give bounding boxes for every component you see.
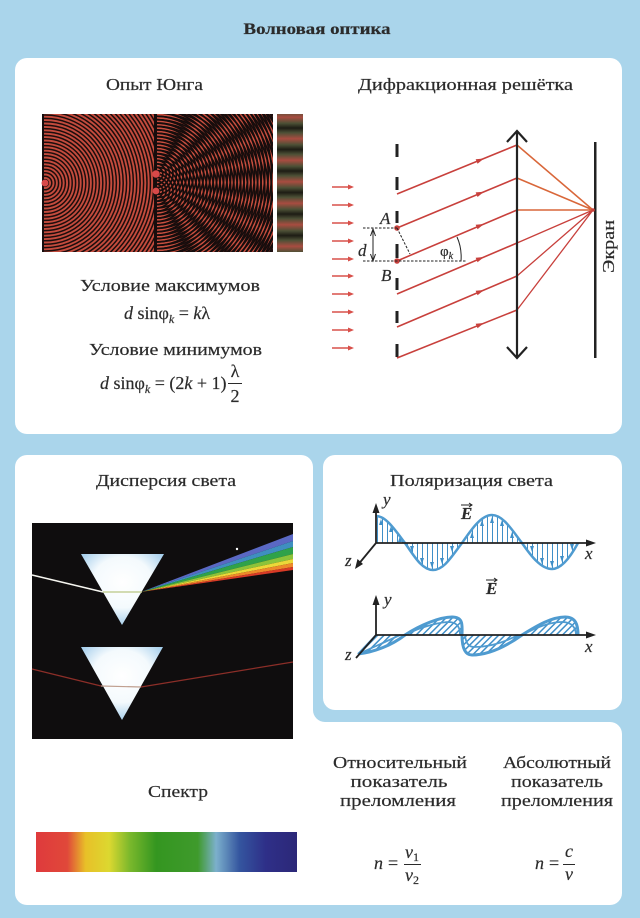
chart: diffraction grating diagram: k [449, 251, 454, 262]
formula: minima: d sinφ [100, 373, 145, 393]
prism bottom [81, 647, 163, 720]
incoming light arrows [332, 184, 354, 350]
text: relative refractive index: показатель [350, 772, 448, 791]
label: spectrum: Спектр [148, 782, 208, 801]
formula: maxima: kλ [193, 303, 210, 323]
text: absolute refractive index: Абсолютный [503, 753, 611, 772]
formula: absolute index: c [565, 841, 573, 861]
formula: relative index: v [405, 842, 413, 862]
inner curve [358, 622, 576, 654]
diffracted rays [397, 145, 517, 358]
text: maxima condition: Условие максимумов [80, 276, 260, 295]
field label: E [485, 579, 497, 598]
text: absolute refractive index [501, 753, 613, 810]
chart: polarized wave, inclined plane: x [584, 637, 593, 656]
converging rays [517, 145, 593, 210]
prism top [81, 554, 164, 625]
formula: minima: = (2 [150, 373, 184, 394]
point markers [394, 225, 400, 231]
formula: relative index [374, 842, 421, 887]
chart: diffraction grating diagram: B [381, 266, 392, 285]
formula: minima [100, 361, 242, 406]
axes [357, 508, 590, 566]
wave hatching [376, 515, 578, 570]
formula: maxima: k [169, 312, 175, 326]
chart: diffraction grating diagram: d [358, 241, 367, 260]
chart: Young interference pattern [42, 114, 273, 252]
formula: maxima: d sinφ [124, 303, 169, 323]
formula: maxima: = [174, 303, 193, 323]
dashed construction lines [363, 228, 466, 261]
chart: diffraction grating diagram: φ [440, 244, 449, 260]
formula: relative index: n [374, 853, 383, 873]
axes [356, 600, 590, 658]
formula: relative index: v [405, 865, 413, 885]
formula: minima: k [145, 382, 151, 396]
formula: minima: k + 1) [184, 373, 227, 393]
text: absolute refractive index: преломления [501, 791, 613, 810]
chart: polarized wave, vertical plane [344, 490, 596, 570]
slit distance arrow [370, 229, 376, 261]
formula: relative index: 1 [413, 850, 419, 864]
labels: A [379, 209, 391, 228]
formula: relative index: 2 [413, 873, 419, 887]
rainbow fan [141, 534, 293, 592]
field label: E [460, 504, 472, 523]
formula: absolute index: = [549, 853, 559, 873]
field arrowheads [379, 517, 574, 568]
red ray [32, 669, 101, 686]
heading: diffraction grating: Дифракционная решётка [358, 75, 574, 94]
text: minima condition: Условие минимумов [89, 340, 262, 359]
wave hatching [358, 617, 578, 655]
chart: polarized wave, vertical plane: x [584, 544, 593, 563]
text: relative refractive index: преломления [340, 791, 456, 810]
grating slits [396, 144, 398, 357]
axis labels: y [381, 490, 391, 509]
chart: spectrum band [36, 832, 297, 872]
ray in prism [103, 591, 142, 593]
formula: absolute index [535, 841, 575, 884]
lens [507, 131, 527, 358]
formula: minima: λ [231, 361, 240, 381]
screen [594, 142, 596, 358]
title: Волновая оптика [244, 21, 390, 38]
heading: dispersion: Дисперсия света [96, 471, 237, 490]
angle arc [457, 237, 461, 261]
formula: minima: 2 [230, 386, 240, 406]
panel: dispersion and refraction [15, 455, 622, 905]
label: screen: Экран [599, 220, 618, 273]
stray light dots [236, 548, 238, 550]
axis labels: y [382, 590, 392, 609]
formula: relative index: = [388, 853, 398, 873]
wave curve [358, 617, 578, 655]
chart: dispersion prisms [32, 523, 293, 739]
formula: absolute index: v [565, 864, 573, 884]
heading: Young's experiment: Опыт Юнга [106, 75, 203, 94]
text: absolute refractive index: показатель [511, 772, 603, 791]
ray arrowheads [476, 158, 484, 328]
white ray [32, 575, 103, 592]
chart: polarized wave, inclined plane: z [344, 645, 352, 664]
red ray through prism [101, 686, 141, 687]
chart: polarized wave, vertical plane: z [344, 551, 352, 570]
panel: polarization [323, 455, 622, 710]
heading: polarization: Поляризация света [390, 471, 554, 490]
chart: fringe strip [277, 114, 303, 252]
chart: polarized wave, inclined plane [344, 578, 596, 664]
wave curve [376, 515, 578, 570]
text: relative refractive index [333, 753, 467, 810]
panel: interference and grating [15, 58, 622, 434]
formula: absolute index: n [535, 853, 544, 873]
text: relative refractive index: Относительный [333, 753, 467, 772]
red ray exit [141, 662, 293, 687]
chart: diffraction grating diagram [332, 131, 596, 358]
